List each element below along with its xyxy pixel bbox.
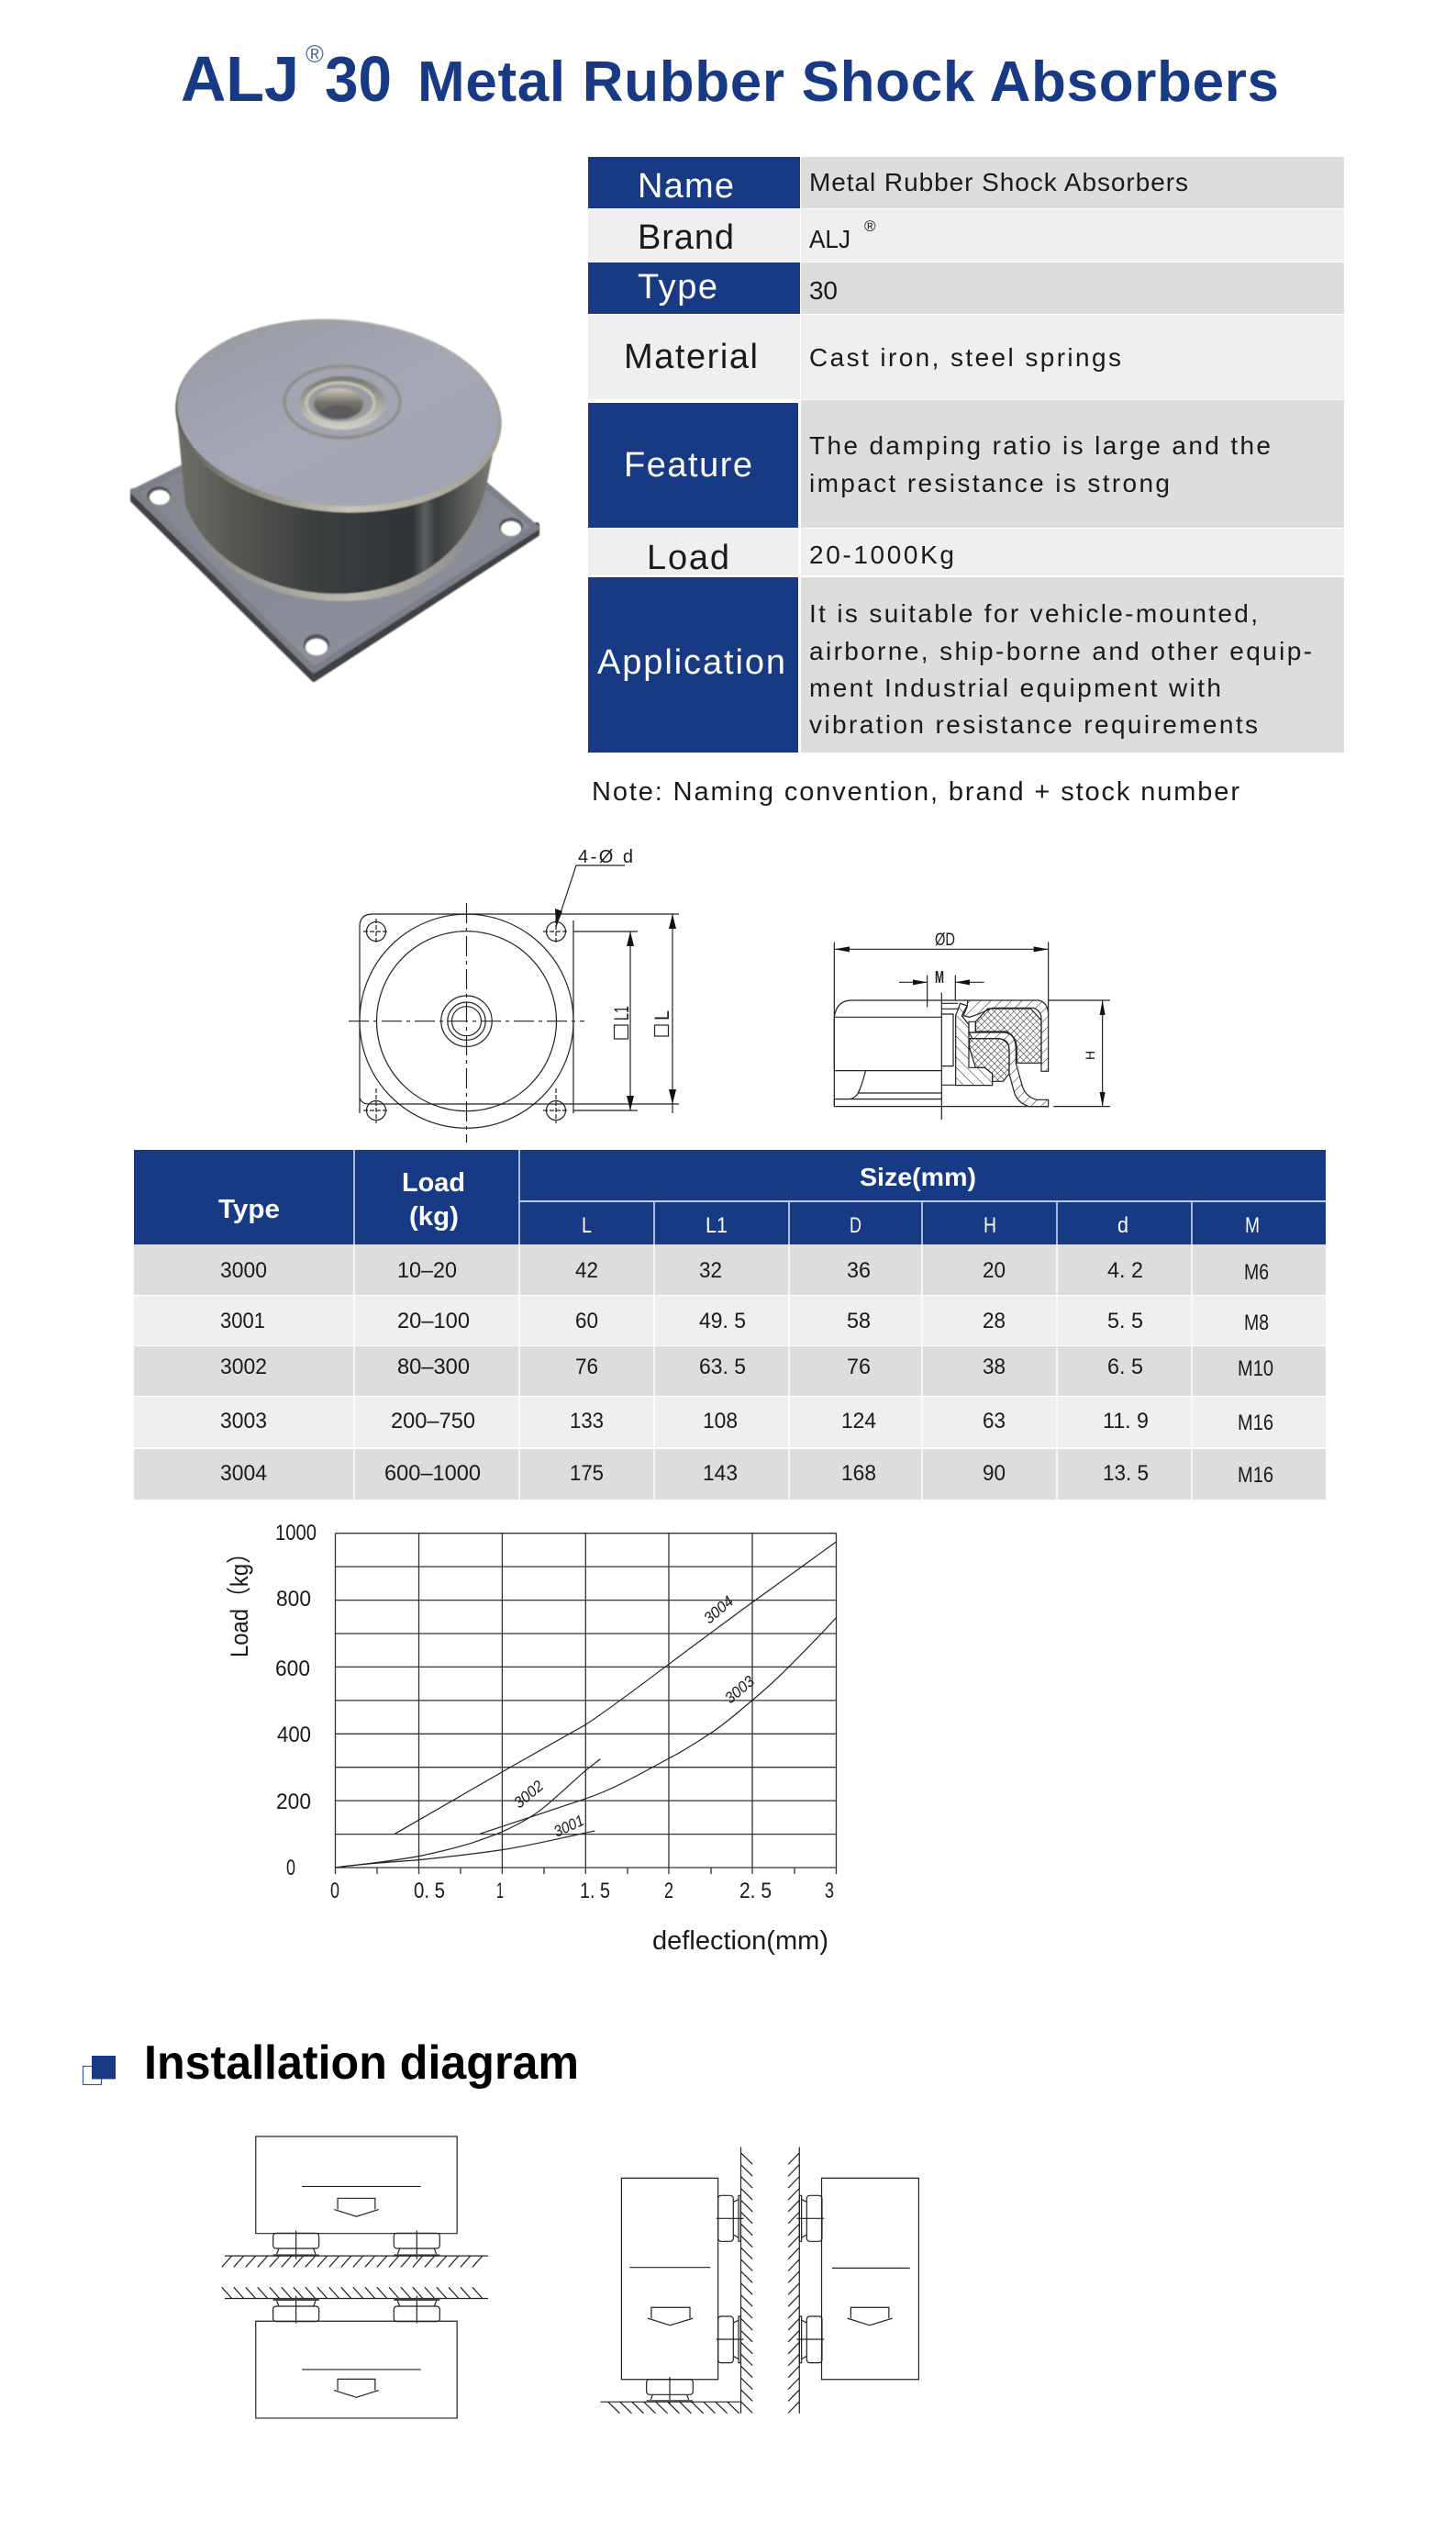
floor and left wall hatching (600, 2147, 752, 2414)
row: brand: ALJ (809, 225, 850, 253)
row 3000: 36 (847, 1258, 871, 1283)
y axis ticks: 400 (277, 1723, 311, 1747)
row 3000: 42 (575, 1258, 598, 1283)
y axis ticks: 600 (275, 1656, 310, 1681)
row 3000: 3000 (220, 1258, 267, 1283)
row 3002: 63. 5 (699, 1355, 746, 1379)
row 3001: 5. 5 (1107, 1309, 1143, 1333)
row 3003: 3003 (220, 1409, 267, 1433)
row: material: Material (624, 338, 758, 376)
H label: H (1083, 1051, 1097, 1060)
table header: Size(mm) (860, 1163, 976, 1191)
x axis ticks: 1 (496, 1879, 504, 1903)
x axis ticks: 2. 5 (739, 1879, 772, 1903)
table header: Load (402, 1168, 465, 1198)
dimension table (134, 1150, 1326, 1500)
row 3004: 90 (983, 1461, 1006, 1486)
table header: d (1117, 1213, 1128, 1238)
installation diagram: wall mounted (600, 2147, 918, 2414)
table header: D (850, 1213, 861, 1238)
y axis ticks (275, 1521, 317, 1880)
section icon (83, 2056, 116, 2085)
row 3001: M8 (1244, 1311, 1269, 1335)
row: material: Cast iron, steel springs (809, 343, 1121, 372)
row 3003: 11. 9 (1103, 1409, 1149, 1433)
x axis ticks: 0. 5 (414, 1879, 445, 1903)
drawing: side section with dimensions (834, 931, 1110, 1120)
row: feature (588, 400, 1344, 528)
row 3002: 80–300 (397, 1355, 470, 1379)
chart grid (336, 1534, 837, 1874)
row: feature: Feature (624, 446, 752, 485)
title: Metal Rubber Shock Absorbers (417, 50, 1279, 114)
row 3004: 168 (841, 1461, 876, 1486)
row 3002: M10 (1238, 1356, 1273, 1381)
row 3001: 3001 (220, 1309, 265, 1333)
row 3001 (134, 1296, 1326, 1345)
row 3004: 175 (570, 1461, 604, 1486)
table header: L1 (706, 1213, 728, 1238)
row 3002: 6. 5 (1107, 1355, 1143, 1379)
title: 30 (325, 43, 392, 115)
x axis ticks: 1. 5 (580, 1879, 610, 1903)
right wall hatching (788, 2147, 799, 2414)
x axis title: deflection(mm) (652, 1926, 828, 1956)
curve label 3001: 3001 (551, 1812, 587, 1841)
x axis ticks: 2 (664, 1879, 673, 1903)
row: load: 20-1000Kg (809, 541, 954, 569)
row 3000 (134, 1244, 1326, 1295)
row 3004: 13. 5 (1103, 1461, 1149, 1486)
right load box (822, 2178, 918, 2380)
row: brand: ® (864, 218, 876, 235)
table header: (kg) (409, 1202, 459, 1232)
x axis ticks (330, 1879, 834, 1903)
diameter D label: ØD (935, 931, 955, 950)
specification table (588, 157, 1344, 753)
row 3003: 124 (841, 1409, 876, 1433)
ceiling hatching (222, 2287, 488, 2299)
y axis ticks: 200 (276, 1790, 311, 1814)
y axis ticks: 800 (276, 1587, 311, 1612)
floor hatching (222, 2256, 488, 2267)
row: brand: Brand (638, 218, 734, 257)
right wall mounts (796, 2195, 824, 2363)
title: ® (306, 40, 324, 68)
row: application: Application (597, 643, 785, 682)
row 3003: 200–750 (391, 1409, 475, 1433)
row: feature: impact resistance is strong (809, 469, 1170, 497)
curve label 3003: 3003 (721, 1672, 759, 1707)
table header: L (582, 1213, 592, 1238)
x axis ticks: 0 (330, 1879, 339, 1903)
row 3000: 10–20 (397, 1258, 457, 1283)
table header (134, 1150, 1326, 1244)
row 3003 (134, 1397, 1326, 1447)
row: material (588, 315, 1344, 399)
row 3003: M16 (1238, 1411, 1273, 1435)
L dimension label: L (650, 1010, 673, 1021)
curves (336, 1542, 836, 1868)
left load box (621, 2178, 718, 2380)
row 3004: 3004 (220, 1461, 267, 1486)
row 3004 (134, 1449, 1326, 1500)
row 3000: 32 (699, 1258, 722, 1283)
row 3002: 3002 (220, 1355, 267, 1379)
row: application: vibration resistance requirements (809, 710, 1258, 739)
row: application: It is suitable for vehicle-mounted, (809, 599, 1258, 628)
cylindrical side wall (177, 413, 501, 594)
row: application: ment Industrial equipment with (809, 674, 1221, 702)
table header: H (984, 1213, 996, 1238)
drawing: top view with dimensions (349, 847, 679, 1143)
curve label 3004: 3004 (700, 1592, 737, 1627)
row: feature: The damping ratio is large and the (809, 431, 1271, 460)
body fillet at base (187, 496, 488, 601)
centre boss (284, 366, 400, 438)
title: ALJ (181, 43, 299, 115)
section heading: Installation diagram (144, 2036, 579, 2090)
lower load box (256, 2321, 457, 2418)
left wall mounts (717, 2195, 744, 2363)
L1 dimension label: L1 (610, 1006, 633, 1021)
row 3003: 133 (570, 1409, 604, 1433)
row 3001: 49. 5 (699, 1309, 746, 1333)
upper load box (256, 2136, 457, 2234)
row: load: Load (647, 539, 729, 577)
row: application (588, 577, 1344, 753)
table header: Type (218, 1195, 280, 1224)
curve label 3002: 3002 (510, 1777, 548, 1812)
base plate top (134, 465, 536, 670)
row 3003: 108 (703, 1409, 738, 1433)
row: brand (588, 209, 1344, 262)
title (181, 40, 1279, 115)
row 3004: 600–1000 (384, 1461, 481, 1486)
L dimension label (650, 1010, 673, 1036)
installation diagram: floor and ceiling mounted (222, 2136, 488, 2418)
ceiling mounts (273, 2296, 439, 2324)
row: type (588, 262, 1344, 314)
floor mounts (273, 2231, 439, 2259)
row 3002: 76 (575, 1355, 598, 1379)
plate mounting holes (147, 486, 523, 655)
M label: M (935, 968, 944, 987)
row 3001: 28 (983, 1309, 1006, 1333)
y axis ticks: 1000 (275, 1521, 317, 1545)
base plate edge (133, 491, 537, 679)
rim highlight (169, 308, 508, 523)
row 3001: 60 (575, 1309, 598, 1333)
table header: M (1245, 1213, 1260, 1238)
row 3002 (134, 1346, 1326, 1396)
y axis title: Load（kg） (226, 1542, 253, 1657)
row 3000: 4. 2 (1107, 1258, 1143, 1283)
product photo: metal rubber shock absorber (133, 308, 537, 679)
row 3004: M16 (1238, 1463, 1273, 1488)
naming note: Note: Naming convention, brand + stock number (592, 777, 1239, 807)
row 3002: 76 (847, 1355, 871, 1379)
row: type: 30 (809, 276, 838, 305)
bottom mount (647, 2377, 693, 2404)
load-deflection chart (226, 1521, 837, 1956)
L1 dimension label (610, 1006, 633, 1039)
row 3002: 38 (983, 1355, 1006, 1379)
row 3004: 143 (703, 1461, 738, 1486)
row: type: Type (638, 268, 717, 307)
leader label: 4-Ø d (578, 847, 633, 867)
row 3001: 58 (847, 1309, 871, 1333)
row 3000: 20 (983, 1258, 1006, 1283)
row: application: airborne, ship-borne and other equip- (809, 637, 1312, 665)
x axis ticks: 3 (825, 1879, 834, 1903)
row: name: Name (638, 167, 734, 206)
y axis ticks: 0 (286, 1856, 295, 1880)
row 3000: M6 (1244, 1260, 1269, 1285)
row: name: Metal Rubber Shock Absorbers (809, 168, 1188, 196)
row: load (588, 529, 1344, 577)
row 3003: 63 (983, 1409, 1006, 1433)
row 3001: 20–100 (397, 1309, 470, 1333)
row: name (588, 157, 1344, 208)
top face (171, 309, 505, 517)
